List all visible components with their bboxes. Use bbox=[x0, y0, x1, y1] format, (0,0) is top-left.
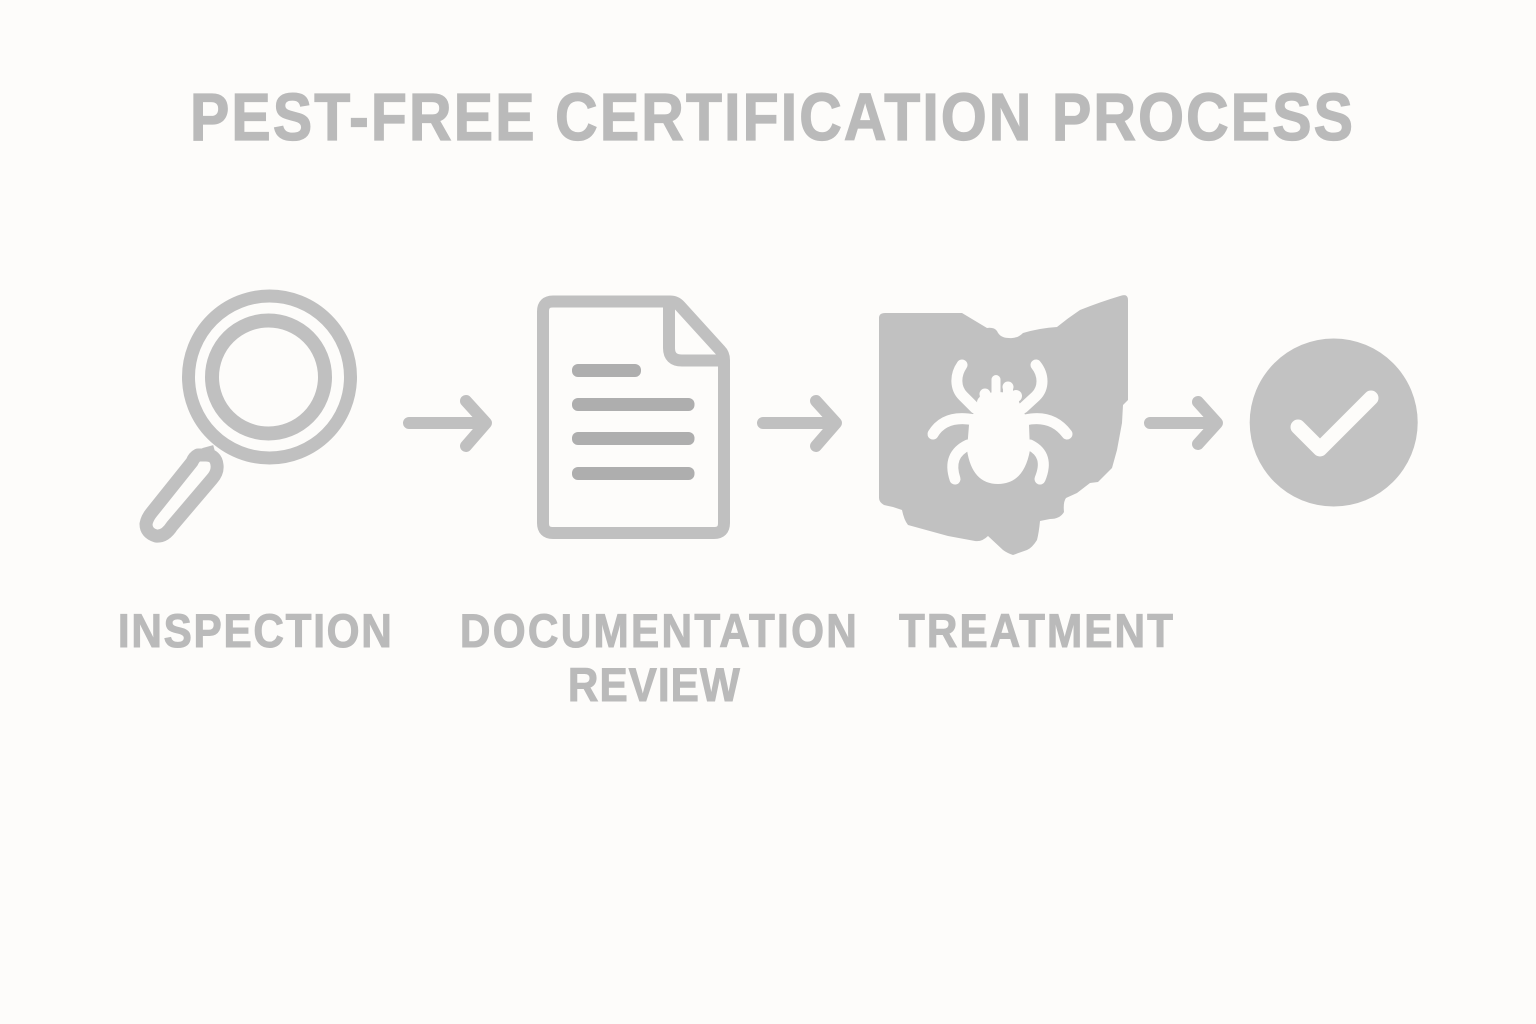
arrow: inspection to documentation bbox=[409, 401, 486, 446]
arrow: treatment to certification bbox=[1150, 402, 1217, 444]
title: PEST-FREE CERTIFICATION PROCESS bbox=[190, 81, 1353, 155]
icon: document bbox=[543, 302, 724, 533]
icon: check badge bbox=[1250, 338, 1418, 506]
label: documentation review: REVIEW bbox=[568, 660, 741, 712]
label: documentation review: DOCUMENTATION bbox=[460, 606, 857, 658]
label: documentation review bbox=[460, 606, 857, 712]
tick bbox=[933, 365, 1067, 484]
tick body bbox=[967, 396, 1030, 484]
tick head bbox=[977, 375, 1022, 412]
label: inspection: INSPECTION bbox=[118, 606, 392, 658]
icon: Ohio map with tick bbox=[879, 295, 1128, 555]
label: treatment: TREATMENT bbox=[899, 606, 1173, 658]
Ohio silhouette bbox=[879, 295, 1128, 555]
arrow: documentation to treatment bbox=[763, 401, 836, 446]
icon: magnifying glass bbox=[146, 296, 350, 536]
tick legs bbox=[933, 365, 1067, 479]
